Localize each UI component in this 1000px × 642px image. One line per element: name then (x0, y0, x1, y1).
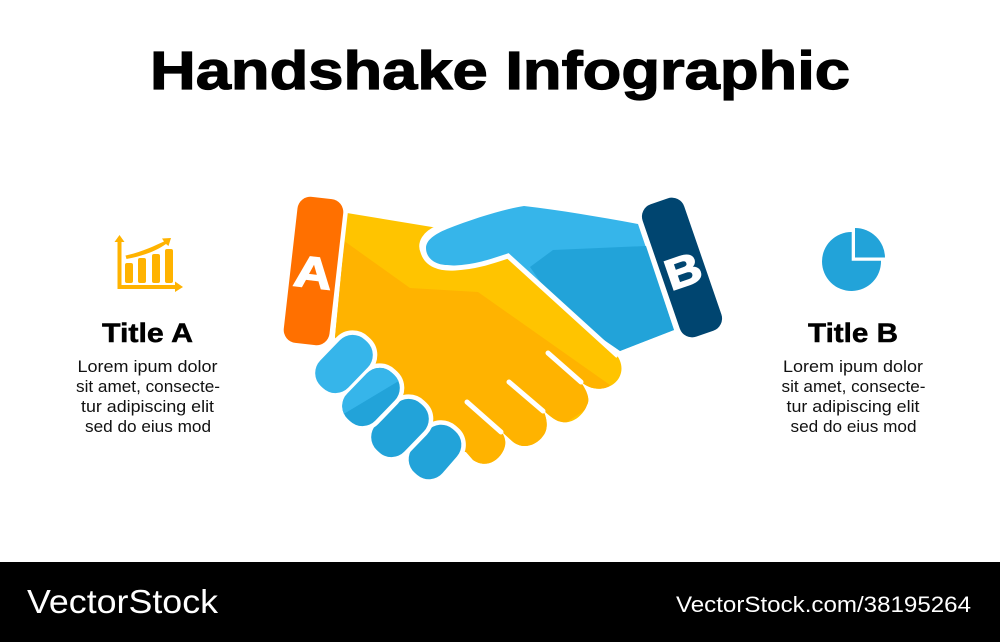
yellow hand shadow (335, 242, 610, 464)
finger 3 (364, 391, 436, 465)
text block: A description (76, 357, 220, 436)
footer logo: VectorStock (27, 584, 218, 621)
text block: B description (782, 357, 926, 436)
icon: bar chart with rising arrow (114, 235, 183, 292)
yellow hand (335, 213, 622, 464)
text block: A description: sit amet, consecte- (76, 377, 220, 396)
finger 2 (335, 360, 407, 434)
text block: A description: tur adipiscing elit (81, 397, 214, 416)
finger slits (467, 353, 581, 432)
text block: B description: sed do eius mod (790, 417, 916, 436)
handshake illustration (282, 194, 726, 487)
letter B: B (658, 242, 708, 300)
text block: B description: sit amet, consecte- (782, 377, 926, 396)
text block: B description: Lorem ipum dolor (783, 357, 923, 376)
footer bar (0, 562, 1000, 642)
footer url: VectorStock.com/38195264 (676, 592, 971, 617)
icon: pie chart (822, 228, 885, 291)
cuff A (282, 195, 345, 347)
heading: Title B: Title B (808, 318, 898, 348)
text block: A description: Lorem ipum dolor (78, 357, 218, 376)
cuff B (638, 194, 726, 341)
finger 4 (401, 417, 469, 487)
panel: title A (76, 235, 220, 436)
letter A: A (291, 247, 335, 300)
finger 1 (308, 327, 380, 401)
finger 2 highlight (342, 368, 398, 414)
blue fingers (308, 327, 469, 487)
title: Handshake Infographic (150, 41, 850, 101)
text block: B description: tur adipiscing elit (786, 397, 920, 416)
blue hand palm and thumb (426, 206, 674, 351)
text block: A description: sed do eius mod (85, 417, 211, 436)
panel: title B (782, 228, 926, 436)
heading: Title A: Title A (102, 318, 193, 348)
